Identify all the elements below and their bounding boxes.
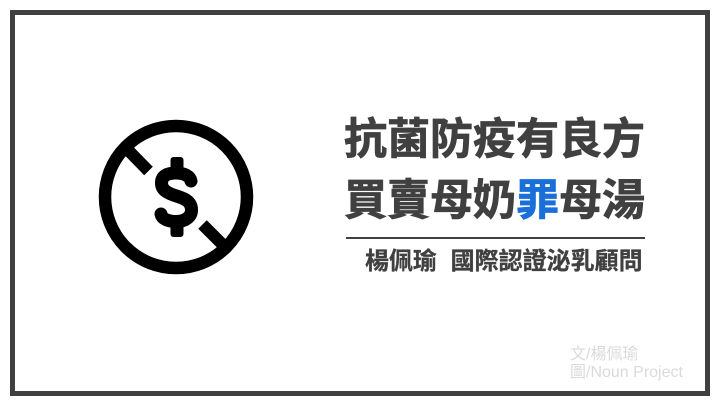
icon: crossed-out dollar sign xyxy=(98,120,254,274)
divider xyxy=(346,237,645,239)
title line 2: 買賣母奶罪母湯 xyxy=(344,177,645,225)
credits: 文/楊佩瑜 xyxy=(570,346,638,363)
credits: 圖/Noun Project xyxy=(570,364,683,381)
title line 1: 抗菌防疫有良方 xyxy=(344,116,645,164)
credits xyxy=(570,345,683,381)
byline: 楊佩瑜 國際認證泌乳顧問 xyxy=(365,248,643,275)
